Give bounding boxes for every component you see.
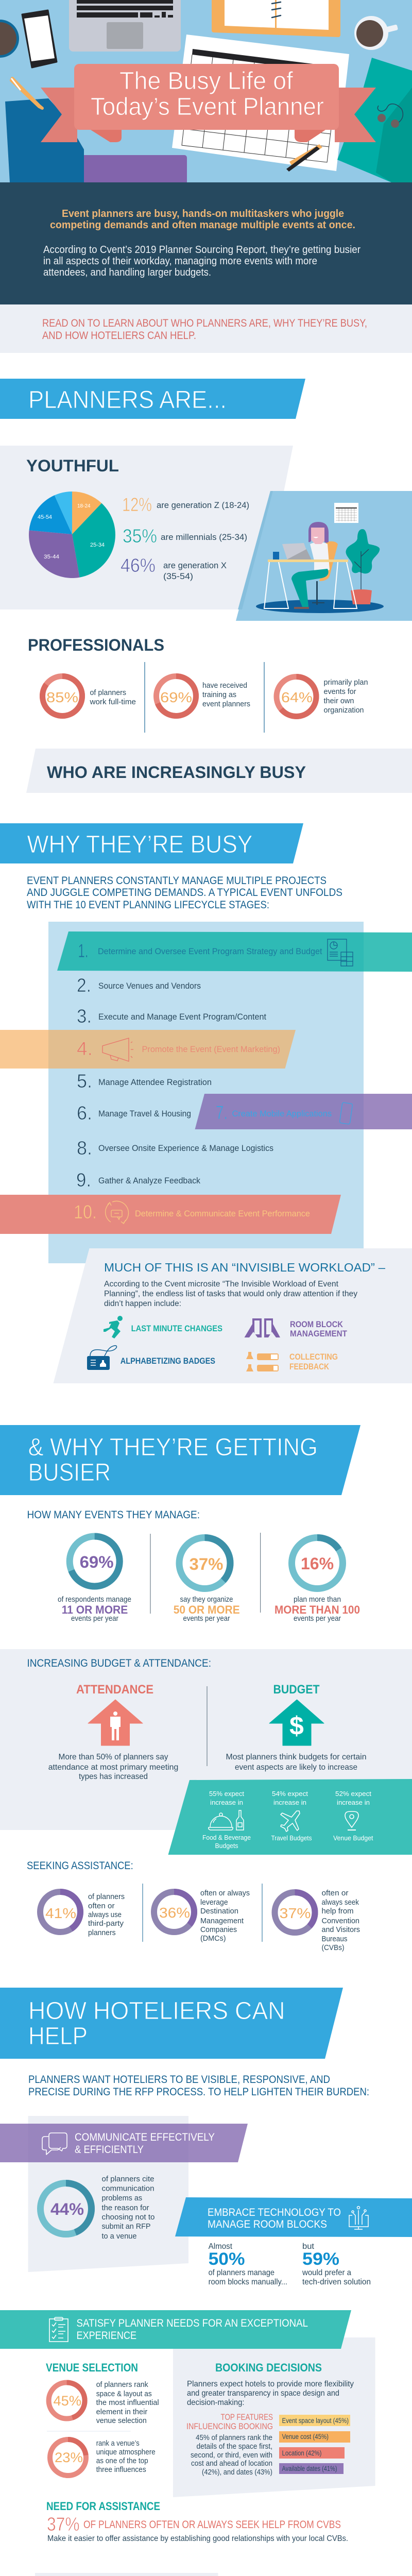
text: unique atmosphere — [96, 2439, 156, 2474]
stat: food and beverage — [202, 1790, 251, 1850]
donut: 45 percent: 45% — [54, 2393, 81, 2409]
bar chart: top features — [279, 2415, 350, 2474]
item: collecting feedback — [246, 1352, 338, 1371]
icon: coffee cup right — [354, 16, 398, 50]
section: need for assistance — [46, 2500, 348, 2543]
donut: 36 percent: 36% — [159, 1905, 190, 1921]
donut: 44 percent: 44% — [50, 2200, 84, 2218]
band: communicate effectively — [0, 2124, 248, 2162]
stat: venue: 52% expect — [335, 1790, 371, 1798]
icon: pen — [286, 144, 322, 172]
column: booking decisions — [186, 2361, 354, 2477]
text: destination management: leverage — [200, 1899, 228, 1907]
stage 4: 4. — [77, 1038, 93, 1059]
heading: youthful: YOUTHFUL — [26, 456, 119, 475]
text: why busy intro: AND JUGGLE COMPETING DEMANDS. A TYPICAL EVENT UNFOLDS — [27, 887, 342, 899]
stage 2: Source Venues and Vendors — [98, 981, 201, 991]
text: training: have received — [202, 682, 247, 690]
column: attendance: ATTENDANCE — [76, 1683, 153, 1697]
column: attendance: types has increased — [79, 1772, 148, 1781]
stage 3: Execute and Manage Event Program/Content — [98, 1012, 266, 1022]
column: attendance: More than 50% of planners say — [59, 1753, 168, 1761]
text: full time: work full-time — [89, 698, 136, 706]
text: more than 100: MORE THAN 100 — [274, 1603, 360, 1616]
text: communication problems: communication — [102, 2184, 154, 2193]
text: unique atmosphere: as one of the top — [96, 2457, 148, 2465]
stage 6: Manage Travel & Housing — [98, 1109, 191, 1118]
text: top features: second, or third, even with — [191, 2451, 272, 2460]
stage 8: 8. — [77, 1138, 92, 1159]
text: convention bureaus: help from — [321, 1907, 353, 1916]
icon: calendar — [172, 35, 349, 171]
icon: laptop — [69, 0, 181, 52]
panel: booking decisions background — [173, 2337, 375, 2497]
desk — [264, 560, 357, 608]
pie chart: age groups: 35-44 — [44, 554, 59, 560]
panel: professionals stats — [42, 662, 368, 733]
text: own organization — [323, 679, 368, 715]
arrow: budget up: $ — [289, 1711, 304, 1740]
icon: pencil — [11, 78, 42, 108]
title: The Busy Life of — [119, 67, 294, 95]
icon: coffee cup left — [0, 20, 19, 58]
icon: megaphone — [102, 1038, 133, 1061]
heading: seeking assistance: SEEKING ASSISTANCE: — [27, 1860, 133, 1872]
stat: food and beverage: Food & Beverage — [202, 1834, 251, 1841]
item: alphabetizing badges: ALPHABETIZING BADGES — [121, 1356, 215, 1366]
text: space and layout: the most influential — [96, 2399, 159, 2407]
stat: millennials — [123, 526, 247, 547]
column: attendance: attendance at most primary meeting — [48, 1763, 178, 1772]
intro panel: According to Cvent’s 2019 Planner Sourcing Report, they’re getting busier — [43, 244, 360, 256]
title ribbon: Today’s Event Planner — [91, 93, 324, 121]
text: destination management: (DMCs) — [200, 1935, 226, 1943]
stat: generation z — [122, 494, 249, 515]
text: training: training as — [202, 691, 236, 699]
stage 6 — [77, 1103, 191, 1124]
icon: wall calendar — [334, 503, 358, 523]
icon: budget — [328, 939, 353, 966]
text: invisible workload body: didn’t happen include: — [104, 1299, 181, 1308]
stat: 59 percent tech: but — [302, 2242, 315, 2251]
icon: phone — [339, 1103, 353, 1124]
stage 1: Determine and Oversee Event Program Strategy and Budget — [98, 947, 322, 956]
heading: invisible workload: MUCH OF THIS IS AN “INVISIBLE WORKLOAD” – — [104, 1261, 385, 1274]
stat: travel: increase in — [273, 1799, 306, 1806]
column: budget: BUDGET — [273, 1683, 320, 1697]
stage 3: 3. — [77, 1006, 92, 1027]
stage 10: Determine & Communicate Event Performance — [135, 1209, 310, 1218]
icon: phone — [22, 10, 57, 67]
panel: communicate — [0, 2116, 248, 2272]
panel: cost — [0, 2573, 275, 2576]
rug — [256, 600, 384, 613]
heading: increasing: INCREASING BUDGET & ATTENDANCE: — [27, 1657, 211, 1669]
donut: 64 percent: 64% — [281, 689, 313, 705]
item: room block management: MANAGEMENT — [290, 1329, 348, 1338]
stage 4 — [0, 1030, 296, 1069]
icon: blue folder — [5, 98, 84, 182]
banner: why they're getting busier: & WHY THEY’RE GETTING — [28, 1434, 318, 1461]
column: budget — [226, 1683, 367, 1772]
text: booking intro: decision-making: — [187, 2398, 244, 2407]
donut: 41 percent: 41% — [45, 1905, 76, 1921]
text: training — [202, 682, 250, 708]
banner: how hoteliers can help: HELP — [28, 2023, 88, 2050]
icon: performance loop — [106, 1201, 129, 1224]
item: room block management: ROOM BLOCK — [290, 1319, 344, 1329]
text: top features: TOP FEATURES — [220, 2412, 273, 2422]
banner: why they're getting busier — [0, 1425, 360, 1495]
text: more than 100: events per year — [294, 1615, 341, 1623]
text: more than 100 — [274, 1596, 360, 1623]
band: communicate effectively: COMMUNICATE EFFECTIVELY — [75, 2131, 215, 2143]
icon: clipboard — [49, 2317, 68, 2342]
intro panel: competing demands and often manage multiple events at once. — [50, 219, 355, 231]
panel: youthful — [0, 446, 293, 609]
panel: seeking assistance stats — [40, 1884, 360, 1952]
band: satisfy planner needs: EXPERIENCE — [76, 2330, 136, 2342]
stat: venue — [333, 1790, 373, 1842]
stage 2 — [77, 975, 201, 996]
text: third party planners: of planners — [88, 1893, 125, 1901]
item: alphabetizing badges — [87, 1346, 215, 1370]
band: satisfy planner needs: SATISFY PLANNER NEEDS FOR AN EXCEPTIONAL — [76, 2317, 308, 2329]
stat: food and beverage: increase in — [210, 1799, 243, 1806]
stat: generation x: are generation X — [163, 561, 227, 570]
stage 5: 5. — [77, 1071, 92, 1092]
stat: generation x: (35-54) — [163, 572, 193, 581]
stage 5: Manage Attendee Registration — [98, 1078, 212, 1087]
text: full time — [89, 689, 136, 706]
stage 2: 2. — [77, 975, 91, 996]
bar chart: top features: Event space layout (45%) — [282, 2417, 349, 2425]
icon: notebook — [212, 0, 340, 37]
text: communication problems: choosing not to — [102, 2213, 154, 2222]
section: need for assistance: Make it easier to offer assistance by establishing good relationships with your local CVBs. — [47, 2534, 348, 2543]
text: convention bureaus — [321, 1889, 360, 1952]
text: destination management: Management — [200, 1917, 244, 1925]
text: communication problems: of planners cite — [102, 2175, 154, 2183]
stage 8 — [77, 1138, 273, 1159]
read on callout: READ ON TO LEARN ABOUT WHO PLANNERS ARE, WHY THEY’RE BUSY, — [42, 317, 367, 329]
stage 10: 10. — [74, 1201, 97, 1223]
donut: 45 percent — [49, 2382, 85, 2418]
text: convention bureaus: Convention — [321, 1917, 359, 1925]
text: booking intro — [187, 2380, 354, 2407]
text: 50 or more — [174, 1596, 240, 1623]
text: booking intro: and greater transparency in space design and — [187, 2389, 339, 2398]
intro panel — [0, 182, 412, 304]
stat: food and beverage: Budgets — [215, 1842, 238, 1850]
donut: 36 percent — [154, 1892, 194, 1932]
text: space and layout: space & layout as — [96, 2390, 152, 2398]
text: 11 or more: of respondents manage — [58, 1596, 131, 1604]
banner: why they're busy — [0, 823, 303, 863]
intro panel: in all aspects of their workday, managing more events with more — [43, 256, 317, 267]
text: communication problems: the reason for — [102, 2204, 149, 2212]
arrow: budget up — [269, 1700, 324, 1745]
text: why busy intro: WITH THE 10 EVENT PLANNING LIFECYCLE STAGES: — [27, 899, 269, 911]
text: top features: (42%), and dates (43%) — [202, 2468, 272, 2477]
banner: how hoteliers can help: HOW HOTELIERS CAN — [28, 1997, 285, 2025]
pie chart: age groups — [29, 492, 115, 578]
text: booking intro: Planners expect hotels to provide more flexibility — [187, 2380, 354, 2388]
text: invisible workload body: According to the Cvent microsite “The Invisible Workload of Event — [104, 1280, 339, 1289]
section: need for assistance: 37% — [47, 2514, 80, 2535]
text: invisible workload body: Planning”, the endless list of tasks that would only draw attention if they — [104, 1290, 357, 1298]
pie chart: age groups: 45-54 — [38, 514, 52, 520]
heading: how many events: HOW MANY EVENTS THEY MANAGE: — [27, 1509, 200, 1521]
icon: pin — [345, 1811, 358, 1830]
text: 11 or more — [58, 1596, 131, 1623]
icon: plane — [281, 1811, 300, 1832]
stage 9: Gather & Analyze Feedback — [98, 1176, 201, 1185]
panel: budget increases — [168, 1779, 412, 1855]
stat: generation z: 12% — [122, 494, 152, 515]
text: communication problems: to a venue — [102, 2232, 137, 2241]
donut: 85 percent — [42, 676, 82, 716]
band: embrace technology: EMBRACE TECHNOLOGY TO — [208, 2207, 341, 2218]
icon: cloche and bottle — [209, 1810, 244, 1830]
stage 1: 1. — [78, 940, 89, 961]
pie chart: age groups: 18-24 — [77, 503, 91, 509]
panel: embrace technology — [175, 2197, 412, 2286]
text: more than 100: plan more than — [294, 1596, 341, 1604]
donut: 23 percent — [50, 2439, 86, 2476]
text: own organization: organization — [323, 706, 364, 715]
text: hoteliers intro: PLANNERS WANT HOTELIERS TO BE VISIBLE, RESPONSIVE, AND — [28, 2074, 330, 2086]
text: communication problems: problems as — [102, 2194, 142, 2202]
text: full time: of planners — [90, 689, 126, 697]
stage 8: Oversee Onsite Experience & Manage Logistics — [98, 1144, 273, 1153]
text: convention bureaus: Bureaus — [321, 1935, 347, 1943]
stage 4: Promote the Event (Event Marketing) — [142, 1045, 280, 1054]
band: embrace technology: MANAGE ROOM BLOCKS — [208, 2218, 327, 2230]
banner: why they're busy: WHY THEY’RE BUSY — [27, 831, 252, 858]
text: convention bureaus: often or — [321, 1889, 349, 1897]
stage 7 — [195, 1094, 412, 1129]
heading: booking decisions: BOOKING DECISIONS — [215, 2361, 322, 2374]
panel: invisible workload — [54, 1248, 412, 1383]
stat: venue: Venue Budget — [333, 1834, 373, 1842]
heading: venue selection: VENUE SELECTION — [46, 2361, 138, 2374]
text: top features — [186, 2412, 273, 2477]
banner: why they're getting busier: BUSIER — [28, 1459, 111, 1486]
stat: 50 percent manual: 50% — [209, 2249, 245, 2269]
text: convention bureaus: always seek — [321, 1899, 359, 1907]
stage 9 — [76, 1170, 201, 1191]
text: hoteliers intro: PRECISE DURING THE RFP PROCESS. TO HELP LIGHTEN THEIR BURDEN: — [28, 2086, 369, 2098]
column: attendance — [48, 1683, 178, 1781]
stat: 59 percent tech: 59% — [302, 2249, 339, 2269]
stage 3 — [77, 1006, 266, 1027]
text: destination management: Destination — [200, 1907, 238, 1916]
stage 1 — [57, 931, 412, 972]
intro panel: attendees, and handling larger budgets. — [43, 267, 211, 278]
stat: food and beverage: 55% expect — [209, 1790, 244, 1798]
stat: 50 percent manual — [209, 2242, 287, 2286]
text: why busy intro: EVENT PLANNERS CONSTANTLY MANAGE MULTIPLE PROJECTS — [27, 875, 327, 887]
text: third party planners: often or — [88, 1902, 115, 1910]
text: hoteliers intro — [28, 2074, 369, 2098]
item: last minute changes: LAST MINUTE CHANGES — [131, 1324, 222, 1333]
stage 10 — [0, 1195, 341, 1234]
text: own organization: their own — [323, 697, 354, 705]
donut: 23 percent: 23% — [55, 2450, 83, 2465]
stat: travel: 54% expect — [272, 1790, 308, 1798]
donut: 16 percent events: 16% — [301, 1554, 334, 1573]
donut: 16 percent events — [291, 1537, 343, 1589]
text: communication problems — [102, 2175, 154, 2241]
illustration: planner at desk — [236, 491, 412, 621]
text: why busy intro — [27, 875, 342, 911]
bar chart: top features: Available dates (41%) — [282, 2465, 337, 2472]
donut: 69 percent: 69% — [160, 689, 192, 705]
panel: increasing budget and attendance — [0, 1649, 412, 1830]
stat: 59 percent tech: tech-driven solution — [302, 2278, 371, 2286]
donut: 44 percent — [40, 2183, 92, 2234]
stat: generation z: are generation Z (18-24) — [157, 501, 249, 510]
stat: 50 percent manual: Almost — [209, 2242, 233, 2251]
text: destination management: Companies — [200, 1926, 237, 1934]
text: 50 or more: say they organize — [180, 1596, 233, 1604]
text: top features: INFLUENCING BOOKING — [186, 2421, 273, 2431]
icon: tech monitor — [349, 2206, 368, 2229]
donut: 37 percent events — [179, 1537, 230, 1589]
donut: 37 percent — [275, 1892, 315, 1933]
text: top features: cost and ahead of location — [191, 2460, 272, 2468]
text: convention bureaus: (CVBs) — [321, 1944, 344, 1952]
donut: 69 percent events: 69% — [80, 1553, 114, 1571]
text: third party planners: planners — [88, 1929, 116, 1937]
intro panel: Event planners are busy, hands-on multitaskers who juggle — [62, 208, 344, 219]
donut: 37 percent: 37% — [279, 1905, 311, 1921]
pie chart: age groups: 25-34 — [90, 542, 105, 548]
text: 50 or more: 50 OR MORE — [174, 1603, 240, 1616]
text: communication problems: submit an RFP — [102, 2223, 150, 2231]
stat: 59 percent tech — [302, 2242, 371, 2286]
text: third party planners — [88, 1893, 125, 1937]
icon: purple tablet — [84, 155, 187, 182]
banner: planners are — [0, 379, 305, 419]
donut: 41 percent — [40, 1892, 80, 1932]
section: need for assistance: NEED FOR ASSISTANCE — [46, 2500, 160, 2513]
text: training: event planners — [202, 700, 250, 708]
arrow: attendance up — [88, 1700, 143, 1745]
text: space and layout: of planners rank — [96, 2381, 148, 2389]
icon: speech bubbles — [42, 2133, 67, 2155]
text: 11 or more: events per year — [71, 1615, 118, 1623]
text: unique atmosphere: unique atmosphere — [96, 2448, 156, 2456]
donut: 64 percent — [277, 677, 316, 716]
person at desk — [273, 522, 338, 609]
column: budget: event aspects are likely to increase — [235, 1763, 357, 1772]
bar chart: top features: Location (42%) — [282, 2449, 321, 2457]
stat: millennials: are millennials (25-34) — [161, 533, 247, 542]
text: third party planners: third-party — [88, 1920, 124, 1928]
icon: teal bag with earphones — [337, 58, 412, 182]
text: unique atmosphere: rank a venue’s — [96, 2439, 140, 2448]
band: satisfy planner needs — [0, 2310, 351, 2349]
hero illustration: desk from above — [0, 0, 412, 182]
stat: 50 percent manual: room blocks manually... — [209, 2278, 287, 2286]
panel: events per year — [58, 1533, 360, 1623]
stat: travel: Travel Budgets — [271, 1834, 312, 1842]
band: communicate effectively: & EFFICIENTLY — [75, 2144, 144, 2156]
banner: how hoteliers can help — [0, 1988, 343, 2059]
stat: generation x — [121, 555, 227, 581]
panel: who are increasingly busy: WHO ARE INCREASINGLY BUSY — [47, 763, 306, 782]
stage 7: Create Mobile Applications — [232, 1109, 332, 1118]
title ribbon — [41, 64, 376, 142]
stat: 59 percent tech: would prefer a — [302, 2268, 351, 2277]
heading: professionals: PROFESSIONALS — [28, 636, 164, 654]
text: 11 or more: 11 OR MORE — [62, 1603, 128, 1616]
text: destination management: often or always — [200, 1889, 250, 1897]
text: space and layout: venue selection — [96, 2417, 147, 2425]
text: destination management — [200, 1889, 250, 1943]
donut: 69 percent events — [70, 1536, 119, 1586]
donut: 37 percent events: 37% — [190, 1555, 224, 1573]
stat: generation x: 46% — [121, 555, 156, 576]
text: 50 or more: events per year — [183, 1615, 230, 1623]
stat: venue: increase in — [337, 1799, 370, 1806]
read on callout — [0, 304, 412, 353]
text: unique atmosphere: three influences — [96, 2466, 146, 2474]
stage 7: 7. — [216, 1102, 228, 1123]
plant — [346, 529, 380, 604]
item: room block management — [244, 1318, 348, 1338]
donut: 69 percent — [157, 676, 196, 716]
stat: travel — [271, 1790, 312, 1842]
text: space and layout: element in their — [96, 2408, 147, 2416]
panel: who are increasingly busy — [26, 749, 412, 793]
text: own organization: events for — [323, 688, 356, 696]
item: last minute changes — [104, 1316, 222, 1338]
stage 6: 6. — [77, 1103, 92, 1124]
stat: millennials: 35% — [123, 526, 157, 547]
donut: 85 percent: 85% — [46, 689, 78, 705]
read on callout: AND HOW HOTELIERS CAN HELP. — [42, 330, 196, 342]
column: budget: Most planners think budgets for certain — [226, 1753, 367, 1761]
stage 5 — [77, 1071, 212, 1092]
text: convention bureaus: and Visitors — [321, 1926, 360, 1934]
stage 9: 9. — [76, 1170, 91, 1191]
text: top features: 45% of planners rank the — [196, 2434, 272, 2442]
banner: planners are: PLANNERS ARE... — [28, 386, 227, 414]
band: embrace technology — [175, 2197, 412, 2237]
section: need for assistance: OF PLANNERS OFTEN OR ALWAYS SEEK HELP FROM CVBS — [83, 2519, 341, 2531]
text: top features: details of the space first, — [197, 2443, 272, 2451]
text: space and layout — [96, 2381, 159, 2425]
text: invisible workload body — [104, 1280, 357, 1308]
text: third party planners: always use — [88, 1911, 122, 1919]
panel: lifecycle stages — [0, 922, 412, 1263]
stat: 50 percent manual: of planners manage — [209, 2268, 274, 2277]
item: collecting feedback: COLLECTING — [289, 1352, 338, 1362]
text: own organization: primarily plan — [323, 679, 368, 687]
bar chart: top features: Venue cost (45%) — [282, 2433, 329, 2441]
item: collecting feedback: FEEDBACK — [289, 1362, 330, 1371]
column: venue selection — [46, 2361, 159, 2476]
